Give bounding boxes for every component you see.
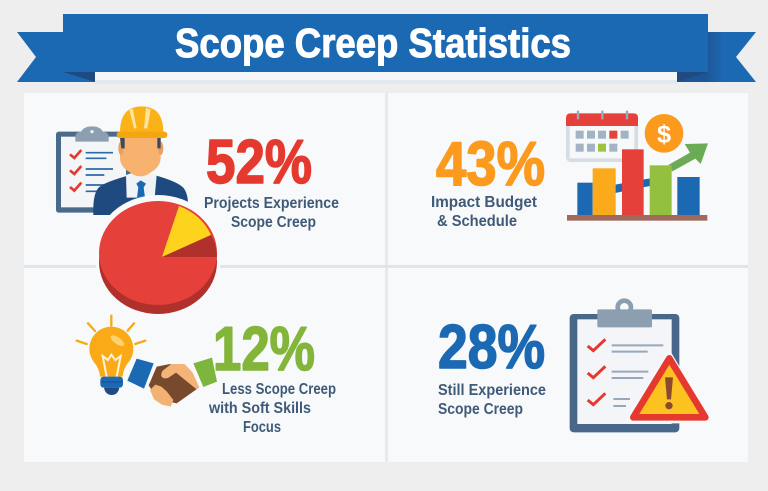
icon: light bulb and handshake [77,316,217,407]
label: impact budget and schedule [431,194,537,230]
stat: 12%: 12% [213,315,315,384]
panel: 28% still experience scope creep [438,301,713,432]
icon: calendar, coin and bar chart: $ [657,120,671,148]
label: impact budget and schedule: Impact Budget [431,194,537,211]
panels background [24,93,748,462]
stat: 52%: 52% [206,128,312,197]
icon: calendar, coin and bar chart [566,111,708,221]
label: projects experience scope creep: Scope Creep [231,214,316,231]
label: less scope creep with soft skills focus: Focus [243,419,281,436]
icon: clipboard with warning triangle [570,301,713,432]
stat: 43%: 43% [436,130,545,199]
label: still experience scope creep [438,382,546,418]
label: impact budget and schedule: & Schedule [437,213,517,230]
label: projects experience scope creep [204,195,339,231]
label: still experience scope creep: Scope Creep [438,401,523,418]
panel: 12% less scope creep with soft skills focus [77,315,336,436]
icon: clipboard and engineer [56,106,188,215]
panel: 43% impact budget and schedule [431,111,708,230]
label: less scope creep with soft skills focus [208,381,336,436]
label: less scope creep with soft skills focus: with Soft Skills [208,400,311,417]
label: less scope creep with soft skills focus: Less Scope Creep [222,381,336,398]
chart: pie [94,195,222,314]
panel: 52% projects experience scope creep [56,106,339,314]
label: still experience scope creep: Still Experience [438,382,546,399]
title banner [17,14,756,84]
label: projects experience scope creep: Projects Experience [204,195,339,212]
title: Scope Creep Statistics [175,20,571,66]
stat: 28%: 28% [438,313,545,382]
